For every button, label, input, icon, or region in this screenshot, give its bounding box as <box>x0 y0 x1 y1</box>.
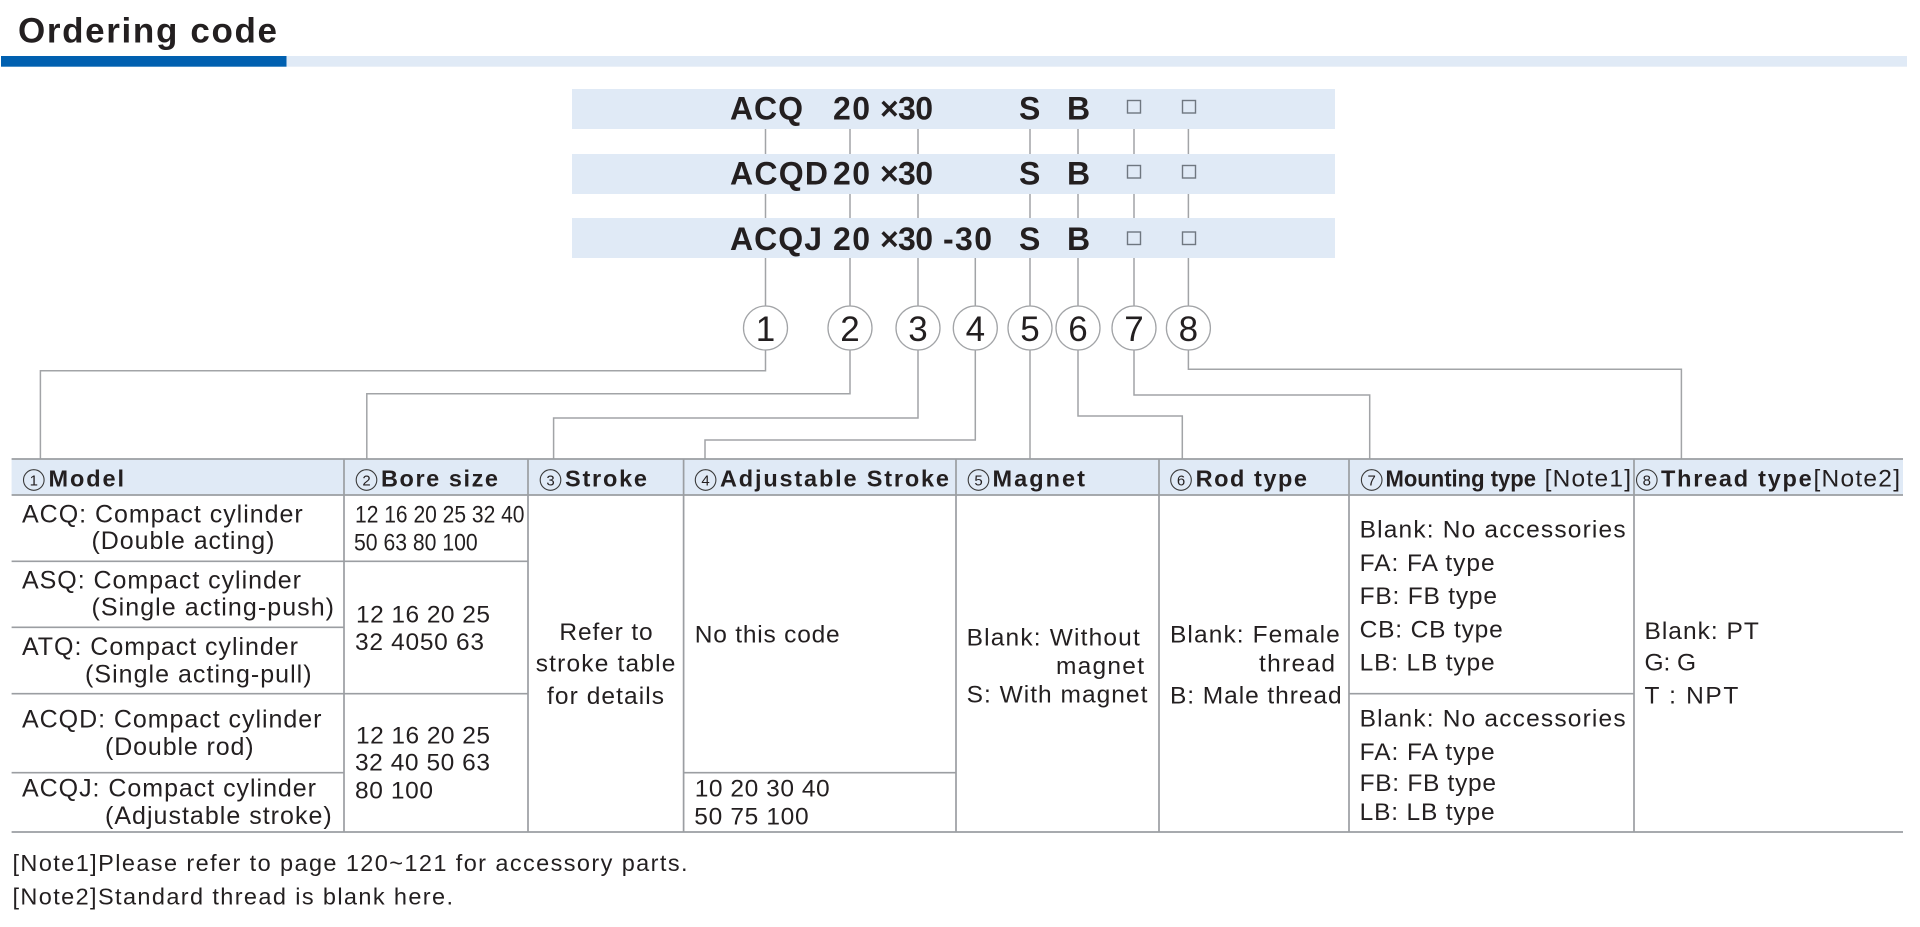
band: ACQ code row <box>572 89 1335 129</box>
band: ACQ code row: S <box>1019 90 1040 126</box>
column 5: magnet <box>967 625 1148 709</box>
column 4: adjustable stroke: 10 20 30 40 <box>695 776 830 803</box>
band: ACQJ code row: B <box>1067 221 1090 257</box>
column 1: model descriptions: (Single acting-push) <box>92 594 334 622</box>
table header labels: [Note1] <box>1545 466 1631 493</box>
table header labels: 3 <box>546 472 555 489</box>
column 1: model descriptions: ASQ: Compact cylinder <box>22 566 301 594</box>
column 2: bore sizes <box>354 502 524 804</box>
numbered callout circles 1 to 8: 3 <box>908 310 928 349</box>
column 4: adjustable stroke <box>694 621 840 830</box>
band: ACQJ code row: 20 <box>833 221 870 257</box>
column 7: mounting type: FA: FA type <box>1360 550 1495 577</box>
numbered callout circles 1 to 8: 6 <box>1068 310 1088 349</box>
column 1: model descriptions: ATQ: Compact cylinder <box>22 633 298 661</box>
column 2: bore sizes: 32 4050 63 <box>355 629 484 656</box>
column 6: rod type: B: Male thread <box>1170 682 1342 709</box>
column 5: magnet: S: With magnet <box>967 682 1148 709</box>
band: ACQD code row <box>572 154 1335 194</box>
column 8: thread type <box>1644 618 1759 709</box>
column 2: bore sizes: 12 16 20 25 <box>356 601 490 628</box>
band: ACQD code row: B <box>1067 155 1090 191</box>
table header labels: Magnet <box>992 466 1085 492</box>
column 3: stroke: Refer to <box>559 619 653 646</box>
column 2: bore sizes: 80 100 <box>355 777 433 804</box>
column 6: rod type: thread <box>1259 651 1335 678</box>
band: ACQD code row: 20 <box>833 155 870 191</box>
numbered callout circles 1 to 8: 4 <box>966 310 985 349</box>
table header labels: 6 <box>1177 472 1185 489</box>
ordering options table <box>12 459 1903 832</box>
band: ACQJ code row: ×30 <box>880 221 933 257</box>
column 7: mounting type: FA: FA type <box>1360 739 1495 766</box>
column 7: mounting type: LB: LB type <box>1360 650 1495 677</box>
band: ACQD code row: ×30 <box>880 155 933 191</box>
column 8: thread type: Blank: PT <box>1644 618 1759 645</box>
column 3: stroke <box>536 619 675 710</box>
table header labels: Thread type <box>1661 466 1812 492</box>
column 8: thread type: G: G <box>1644 650 1696 677</box>
table header labels: [Note2] <box>1814 466 1900 493</box>
band: ACQ code row: B <box>1067 90 1090 126</box>
column 1: model descriptions: ACQD: Compact cylinder <box>22 705 321 733</box>
column 2: bore sizes: 12 16 20 25 <box>356 722 490 749</box>
footnotes: [Note2]Standard thread is blank here. <box>12 884 453 910</box>
numbered callout circles 1 to 8 <box>744 306 1210 350</box>
numbered callout circles 1 to 8: 5 <box>1020 310 1040 349</box>
table header labels: Adjustable Stroke <box>720 466 949 492</box>
column 3: stroke: stroke table <box>536 651 675 678</box>
band: ACQ code row: ACQ <box>730 90 803 126</box>
column 4: adjustable stroke: No this code <box>695 621 840 648</box>
table header labels: 2 <box>362 472 371 489</box>
column 7: mounting type: FB: FB type <box>1360 583 1497 610</box>
column 7: mounting type: LB: LB type <box>1360 799 1495 826</box>
column 4: adjustable stroke: 50 75 100 <box>694 803 809 830</box>
column 2: bore sizes: 50 63 80 100 <box>354 530 478 557</box>
table header labels: Mounting type <box>1386 466 1536 492</box>
column 1: model descriptions: (Double rod) <box>105 733 254 761</box>
table header labels: Stroke <box>565 466 647 492</box>
title: Ordering code: Ordering code <box>18 11 277 50</box>
code example bands <box>572 89 1335 258</box>
column 5: magnet: magnet <box>1056 653 1144 680</box>
numbered callout circles 1 to 8: 8 <box>1179 310 1198 349</box>
column 7: mounting type: CB: CB type <box>1360 616 1503 643</box>
footnotes: [Note1]Please refer to page 120~121 for accessory parts. <box>12 850 688 876</box>
title underline bar <box>1 56 1907 67</box>
column 1: model descriptions: (Adjustable stroke) <box>105 802 332 830</box>
band: ACQJ code row: -30 <box>943 221 992 257</box>
table header labels: 5 <box>974 472 983 489</box>
table header labels: 1 <box>30 472 38 489</box>
table grid <box>12 459 1903 832</box>
band: ACQJ code row: S <box>1019 221 1040 257</box>
column 8: thread type: T : NPT <box>1644 682 1738 709</box>
column 2: bore sizes: 32 40 50 63 <box>355 750 490 777</box>
table header labels: Bore size <box>381 466 498 492</box>
band: ACQ code row: ×30 <box>880 90 933 126</box>
table header labels: Model <box>48 466 124 492</box>
column 6: rod type: Blank: Female <box>1170 622 1340 649</box>
column 1: model descriptions: (Double acting) <box>92 527 274 555</box>
table header labels: 8 <box>1643 472 1651 489</box>
table header background <box>12 459 1903 495</box>
table header labels: Rod type <box>1196 466 1307 492</box>
column 5: magnet: Blank: Without <box>967 625 1140 652</box>
band: ACQ code row: 20 <box>833 90 870 126</box>
column 1: model descriptions: ACQ: Compact cylinder <box>22 501 303 529</box>
band: ACQD code row: S <box>1019 155 1040 191</box>
column 7: mounting type: Blank: No accessories <box>1360 706 1626 733</box>
table header labels: 4 <box>701 472 710 489</box>
column 7: mounting type: FB: FB type <box>1360 770 1496 797</box>
band: ACQJ code row <box>572 218 1335 258</box>
column 2: bore sizes: 12 16 20 25 32 40 <box>355 502 524 529</box>
column 6: rod type <box>1170 622 1342 709</box>
connector lines from code rows to callouts and table columns <box>40 129 1681 459</box>
table header labels <box>24 466 1900 493</box>
column 3: stroke: for details <box>547 683 664 710</box>
column 7: mounting type <box>1360 517 1626 826</box>
numbered callout circles 1 to 8: 2 <box>840 310 860 349</box>
table header labels: 7 <box>1368 472 1376 489</box>
column 1: model descriptions: ACQJ: Compact cylinder <box>22 775 316 803</box>
column 1: model descriptions <box>22 501 334 830</box>
band: ACQD code row: ACQD <box>730 155 828 191</box>
column 7: mounting type: Blank: No accessories <box>1360 517 1626 544</box>
numbered callout circles 1 to 8: 7 <box>1124 310 1144 349</box>
numbered callout circles 1 to 8: 1 <box>756 310 775 349</box>
band: ACQJ code row: ACQJ <box>730 221 822 257</box>
column 1: model descriptions: (Single acting-pull) <box>85 660 312 688</box>
footnotes <box>12 850 688 910</box>
